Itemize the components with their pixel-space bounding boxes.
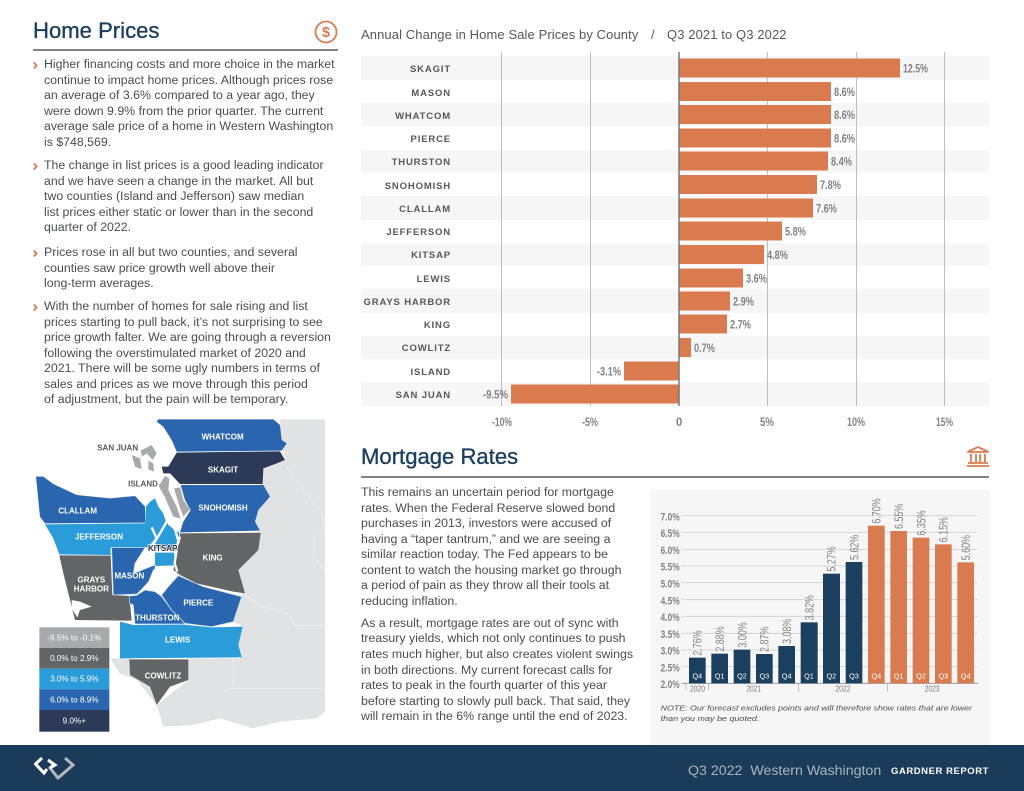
panel: mortgage rate chart: 6.70% xyxy=(870,498,884,524)
panel: mortgage rate chart: than you may be quoted. xyxy=(661,714,759,723)
panel: mortgage rate chart: Q2 xyxy=(916,672,926,681)
county labels: SNOHOMISH xyxy=(198,504,248,513)
text block: mortgage rates commentary: rates. When the Federal Reserve slowed bond xyxy=(361,501,615,515)
icon: bank xyxy=(967,446,989,467)
panel: mortgage rate chart: 5.27% xyxy=(825,546,839,572)
text block: mortgage rates commentary xyxy=(361,485,633,723)
county: Whatcom xyxy=(157,419,287,452)
panel: mortgage rate chart xyxy=(651,490,990,745)
county: Grays Harbor xyxy=(59,555,132,621)
county labels: GRAYS xyxy=(77,576,106,585)
bar chart: annual change by county: SKAGIT xyxy=(410,64,451,75)
county: Jefferson and north Kitsap xyxy=(45,498,179,555)
county labels: KING xyxy=(203,554,223,563)
south sound inlets xyxy=(138,567,177,593)
paragraph 2 xyxy=(44,158,324,234)
paragraph 2: The change in list prices is a good leading indicator xyxy=(44,158,324,172)
bar chart: annual change by county: SAN JUAN xyxy=(396,390,451,401)
bar chart: annual change by county: 2.9% xyxy=(733,294,754,308)
panel: mortgage rate chart: 3.82% xyxy=(802,595,816,620)
text block: mortgage rates commentary: This remains an uncertain period for mortgage xyxy=(361,485,614,499)
panel: mortgage rate chart: NOTE: Our forecast excludes points and will therefore show rates that are lower xyxy=(661,704,973,713)
paragraph 4: following the overstimulated market of 2020 and xyxy=(44,346,306,360)
paragraph 3: long-term averages. xyxy=(44,276,154,290)
text block: mortgage rates commentary: having a “taper tantrum,” and we are seeing a xyxy=(361,532,610,546)
county labels: KITSAP xyxy=(148,544,178,553)
panel: mortgage rate chart: 4.5% xyxy=(661,595,680,607)
panel: mortgage rate chart: 2020 xyxy=(690,685,705,694)
paragraph 4: prices starting to pull back, it’s not surprising to see xyxy=(44,314,323,328)
panel: mortgage rate chart: Q4 xyxy=(782,672,792,681)
map legend: 6.0% to 8.9% xyxy=(50,696,99,705)
paragraph 1: continue to impact home prices. Although prices rose xyxy=(44,73,333,87)
map legend xyxy=(39,627,109,732)
paragraph 4: With the number of homes for sale rising and list xyxy=(44,299,308,313)
bar chart: annual change by county: GRAYS HARBOR xyxy=(364,297,451,308)
text block: mortgage rates commentary: reducing inflation. xyxy=(361,594,458,608)
county: Skagit xyxy=(162,451,285,484)
panel: mortgage rate chart: 2.87% xyxy=(758,626,772,652)
bar chart: annual change by county: 2.7% xyxy=(730,318,751,332)
paragraph 3: counties saw price growth well above their xyxy=(44,261,275,275)
county: Pierce xyxy=(162,576,242,627)
paragraph 3 xyxy=(44,245,298,290)
county labels: WHATCOM xyxy=(202,433,244,442)
chart title: annual change in home sale prices xyxy=(361,27,787,42)
heading: Home Prices: Home Prices xyxy=(33,18,159,43)
county labels: HARBOR xyxy=(74,585,109,594)
paragraph 4: of adjustment, but the pain will be temporary. xyxy=(44,392,288,406)
map legend: 9.0%+ xyxy=(63,717,86,726)
bar chart: annual change by county: 8.6% xyxy=(834,85,855,99)
county: Lewis xyxy=(120,622,243,658)
bar chart: annual change by county: 8.4% xyxy=(831,154,852,168)
panel: mortgage rate chart: 2.5% xyxy=(661,662,680,674)
county labels: JEFFERSON xyxy=(75,533,123,542)
bar chart: annual change by county: COWLITZ xyxy=(402,343,451,354)
county labels: ISLAND xyxy=(128,480,158,489)
county labels: THURSTON xyxy=(135,614,180,623)
county: Mason xyxy=(112,548,155,595)
chart title: annual change in home sale prices: / xyxy=(651,27,655,42)
text block: mortgage rates commentary: treasury yields, which not only continues to push xyxy=(361,631,626,645)
county labels: LEWIS xyxy=(165,636,191,645)
paragraph 2: two counties (Island and Jefferson) saw median xyxy=(44,189,304,203)
paragraph 1: an average of 3.6% compared to a year ago, they xyxy=(44,88,315,102)
paragraph 1: average sale price of a home in Western Washington xyxy=(44,119,333,133)
bar chart: annual change by county: ISLAND xyxy=(411,367,451,378)
heading rule: Mortgage Rates xyxy=(361,476,989,478)
puget sound water xyxy=(136,505,180,572)
bullet marker 3 xyxy=(33,250,38,257)
panel: mortgage rate chart: Q2 xyxy=(737,672,747,681)
bar chart: annual change by county: LEWIS xyxy=(417,274,451,285)
heading rule: Home Prices xyxy=(33,49,338,50)
panel: mortgage rate chart: 6.55% xyxy=(892,503,906,529)
panel: mortgage rate chart: 6.15% xyxy=(937,517,951,542)
bar chart: annual change by county: 10% xyxy=(847,417,865,429)
paragraph 2: quarter of 2022. xyxy=(44,220,131,234)
paragraph 1: Higher financing costs and more choice in the market xyxy=(44,57,335,71)
paragraph 2: and we have seen a change in the market. All but xyxy=(44,174,313,188)
county: Kitsap xyxy=(155,553,175,566)
panel: mortgage rate chart: Q3 xyxy=(938,672,948,681)
bar chart: annual change by county: 5% xyxy=(760,417,774,429)
panel: mortgage rate chart: Q2 xyxy=(826,672,836,681)
panel: mortgage rate chart: Q1 xyxy=(894,672,904,681)
panel: mortgage rate chart: Q1 xyxy=(804,672,814,681)
panel: mortgage rate chart: 3.5% xyxy=(661,629,680,641)
bar chart: annual change by county: KITSAP xyxy=(411,250,451,261)
county: King xyxy=(173,533,261,593)
bar chart: annual change by county: 0.7% xyxy=(694,341,715,355)
panel: mortgage rate chart: 6.5% xyxy=(661,528,680,540)
panel: mortgage rate chart: 7.0% xyxy=(661,511,680,523)
panel: mortgage rate chart: 4.0% xyxy=(661,612,680,624)
bar chart: annual change by county: THURSTON xyxy=(392,157,451,168)
paragraph 4: 2021. There will be some ugly numbers in terms of xyxy=(44,361,320,375)
county: Snohomish xyxy=(180,485,270,532)
panel: mortgage rate chart: 5.5% xyxy=(661,562,680,574)
icon: dollar xyxy=(314,20,338,44)
paragraph 3: Prices rose in all but two counties, and several xyxy=(44,245,298,259)
chart title: annual change in home sale prices: Q3 2021 to Q3 2022 xyxy=(667,27,787,42)
islands: San Juan xyxy=(132,445,157,472)
bar chart: annual change by county: 15% xyxy=(936,417,953,429)
panel: mortgage rate chart: 2.0% xyxy=(661,679,680,691)
bar chart: annual change by county: PIERCE xyxy=(411,134,451,145)
bar chart: annual change by county: SNOHOMISH xyxy=(385,181,451,192)
bar chart: annual change by county: 7.8% xyxy=(820,178,841,192)
bar chart: annual change by county: 7.6% xyxy=(816,202,837,216)
bar chart: annual change by county: CLALLAM xyxy=(399,204,451,215)
bar chart: annual change by county: -5% xyxy=(582,417,598,429)
bar chart: annual change by county: -3.1% xyxy=(597,364,621,378)
map legend: 3.0% to 5.9% xyxy=(50,675,99,684)
county labels: PIERCE xyxy=(183,599,214,608)
map legend: -9.5% to -0.1% xyxy=(47,634,101,643)
text block: mortgage rates commentary: similar reaction today. The Fed appears to be xyxy=(361,547,608,561)
panel: mortgage rate chart: Q4 xyxy=(692,672,702,681)
text block: mortgage rates commentary: content to watch the housing market go through xyxy=(361,563,621,577)
bar chart: annual change by county: -9.5% xyxy=(483,388,508,402)
panel: mortgage rate chart: 3.0% xyxy=(661,646,680,658)
county: Thurston xyxy=(129,590,185,624)
bar chart: annual change by county xyxy=(361,52,989,429)
text block: mortgage rates commentary: purchases in 2013, investors were accused of xyxy=(361,516,611,530)
paragraph 4: sales and prices as we move through this period xyxy=(44,376,308,390)
panel: mortgage rate chart: Q4 xyxy=(961,672,971,681)
paragraph 4: price growth falter. We are going through a reversion xyxy=(44,330,331,344)
panel: mortgage rate chart: 6.0% xyxy=(661,545,680,557)
panel: mortgage rate chart: 2.88% xyxy=(713,626,727,652)
panel: mortgage rate chart: Q3 xyxy=(759,672,769,681)
map: Western Washington counties xyxy=(36,419,325,732)
bullet marker 4 xyxy=(33,304,38,311)
panel: mortgage rate chart: 3.00% xyxy=(735,622,749,648)
paragraph 1: were down 9.9% from the prior quarter. The current xyxy=(44,104,323,118)
bar chart: annual change by county: 8.6% xyxy=(834,132,855,146)
bar chart: annual change by county: -10% xyxy=(492,417,512,429)
text block: mortgage rates commentary: rates to peak in the fourth quarter of this year xyxy=(361,678,607,692)
panel: mortgage rate chart: 5.62% xyxy=(847,534,861,560)
bar chart: annual change by county: KING xyxy=(424,320,451,331)
footer logo xyxy=(34,756,76,780)
text block: mortgage rates commentary: will remain in the 6% range until the end of 2023. xyxy=(361,709,628,723)
county labels xyxy=(58,433,248,681)
grays harbor water xyxy=(72,600,92,617)
bar chart: annual change by county: 5.8% xyxy=(785,224,806,238)
bullet marker 1 xyxy=(33,62,38,69)
panel: mortgage rate chart: 3.08% xyxy=(780,618,794,644)
panel: mortgage rate chart: 2022 xyxy=(835,685,851,694)
county labels: MASON xyxy=(114,572,144,581)
paragraph 2: list prices either static or lower than in the second xyxy=(44,205,313,219)
county labels: COWLITZ xyxy=(145,672,181,681)
panel: mortgage rate chart: 5.0% xyxy=(661,578,680,590)
southwest coast background xyxy=(110,658,157,705)
bar chart: annual change by county: WHATCOM xyxy=(395,111,451,122)
county: Clallam xyxy=(36,477,145,523)
county: Cowlitz xyxy=(129,659,188,705)
text block: home prices bullets xyxy=(33,57,335,406)
paragraph 4 xyxy=(44,299,331,406)
text block: mortgage rates commentary: As a result, mortgage rates are out of sync with xyxy=(361,616,619,630)
county labels: SAN JUAN xyxy=(97,444,138,453)
panel: mortgage rate chart: 2023 xyxy=(925,685,940,694)
text block: mortgage rates commentary: in both directions. My current forecast calls for xyxy=(361,663,612,677)
icon: dollar: $ xyxy=(322,25,330,41)
bar chart: annual change by county: 8.6% xyxy=(834,108,855,122)
footer bar xyxy=(0,745,1024,791)
text block: mortgage rates commentary: a period of pain as they throw all their tools at xyxy=(361,578,609,592)
panel: mortgage rate chart: 5.60% xyxy=(959,535,973,560)
panel: mortgage rate chart: 2.76% xyxy=(691,630,705,656)
panel: mortgage rate chart: Q3 xyxy=(849,672,859,681)
text block: mortgage rates commentary: before starting to slowly pull back. That said, they xyxy=(361,694,630,708)
footer report title: Q3 2022 Western Washington xyxy=(688,763,881,779)
bar chart: annual change by county: 4.8% xyxy=(767,248,788,262)
county labels: SKAGIT xyxy=(208,466,238,475)
bar chart: annual change by county: MASON xyxy=(411,88,451,99)
bar chart: annual change by county: 12.5% xyxy=(903,62,928,76)
panel: mortgage rate chart: Q1 xyxy=(715,672,725,681)
county labels: CLALLAM xyxy=(58,507,97,516)
panel: mortgage rate chart: Q4 xyxy=(871,672,881,681)
map legend: 0.0% to 2.9% xyxy=(50,654,99,663)
eastern counties background xyxy=(157,419,325,728)
chart title: annual change in home sale prices: Annual Change in Home Sale Prices by County xyxy=(361,27,638,42)
islands: Island xyxy=(159,476,190,519)
heading: Mortgage Rates: Mortgage Rates xyxy=(361,444,518,469)
bar chart: annual change by county: 0 xyxy=(676,417,682,429)
text block: mortgage rates commentary: rates much higher, but also creates violent swings xyxy=(361,647,633,661)
bullet marker 2 xyxy=(33,163,38,170)
footer brand: GARDNER REPORT xyxy=(891,766,989,777)
paragraph 1 xyxy=(44,57,335,149)
panel: mortgage rate chart: 2021 xyxy=(746,685,761,694)
paragraph 1: is $748,569. xyxy=(44,135,111,149)
bar chart: annual change by county: 3.6% xyxy=(746,272,767,286)
panel: mortgage rate chart: 6.35% xyxy=(914,510,928,536)
bar chart: annual change by county: JEFFERSON xyxy=(386,227,451,238)
